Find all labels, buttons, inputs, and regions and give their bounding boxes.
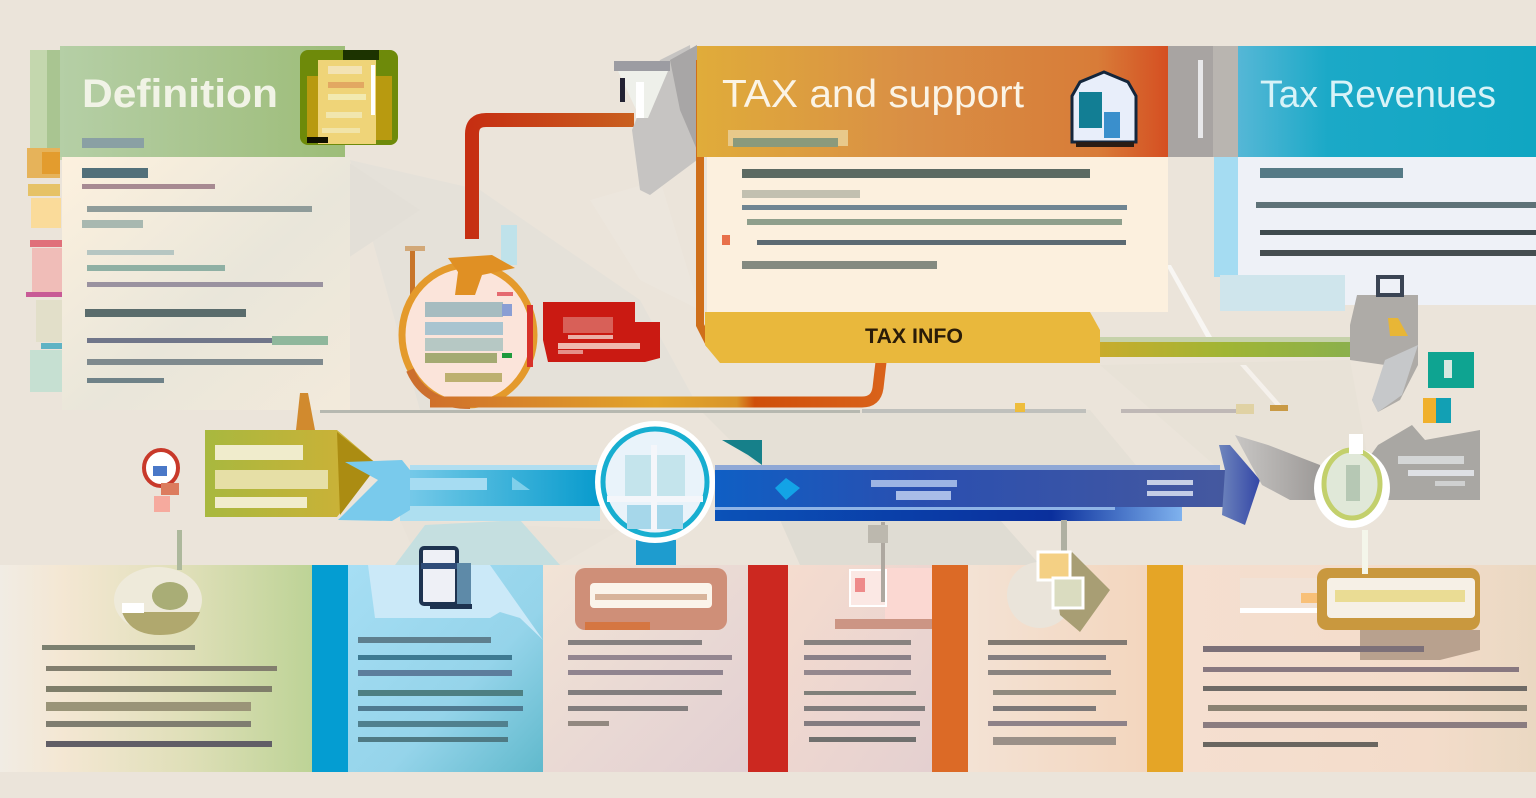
icon: bowl [114,530,202,635]
olive box [205,430,378,517]
text lines [804,640,925,742]
panel: tax and support [697,46,1168,363]
orange side bar [932,565,968,772]
pale body [1238,157,1536,305]
panel: bottom 6 [1183,530,1536,772]
callout: olive label [205,393,378,517]
text lines [82,138,328,383]
lower pale block [1220,275,1345,311]
cream body [62,157,350,410]
icon: document stack [300,50,398,145]
icon: teal marker [1423,352,1474,423]
panel: bottom 1 [0,530,312,772]
panel: bottom 3 [543,565,748,772]
icon: grey padlock [1350,277,1418,412]
text lines [568,640,732,726]
text lines [358,637,523,742]
label block [1240,578,1320,613]
teal header [1238,46,1536,157]
text lines [1203,646,1527,747]
text lines [1256,168,1536,256]
badge shadow [1360,630,1480,660]
panel: tax revenues [1214,46,1536,311]
green header [60,46,345,157]
heading: TAX and support [722,73,1024,116]
panel: bottom 5 [968,520,1147,772]
light side strip [1214,157,1238,277]
icon: glass globe [595,421,715,568]
arrow: red connector [472,120,634,239]
text lines [988,640,1127,745]
divider block [1168,46,1238,157]
timeline thin line [320,403,1288,414]
yellow side bar [1147,565,1183,772]
grey arrow wedge [1235,435,1320,500]
panel: bottom 2 [312,548,543,772]
gold footer bar [705,312,1100,363]
left colour strip [26,50,67,392]
icon: funnel [614,45,697,195]
heading: Definition [82,72,278,116]
badge [575,568,727,630]
icon: teal pennant [722,440,762,465]
blue side bar [312,565,348,772]
badge [1317,530,1480,630]
red side bar [748,565,788,772]
icon: red location pin [144,450,179,512]
icon: document tag [1007,520,1110,632]
panel: bottom 4 [788,522,932,772]
left accent [700,60,710,345]
stem [296,393,315,430]
orange header [697,46,1168,157]
chart: circular checklist [402,225,534,405]
icon: bottle [421,548,472,609]
gold footer bar: TAX INFO [865,325,963,348]
cream body [707,157,1168,312]
cyan section [338,460,610,521]
heading: Tax Revenues [1260,74,1496,116]
arrow: orange connector [430,362,881,402]
panel: definition [26,46,398,410]
callout: red banner [543,302,660,362]
icon: green ring lamp [1314,434,1390,528]
blue section [715,445,1260,525]
text lines [42,645,277,747]
icon: tag document [1072,72,1136,147]
background facets [345,160,1370,565]
icon: grey building [1360,425,1480,500]
arrow: timeline [338,445,1260,525]
icon: note with stem [835,522,932,629]
sub-label [728,130,848,147]
text lines [722,169,1127,269]
arrow: green connector [1100,337,1350,357]
pale highlight [368,565,543,640]
